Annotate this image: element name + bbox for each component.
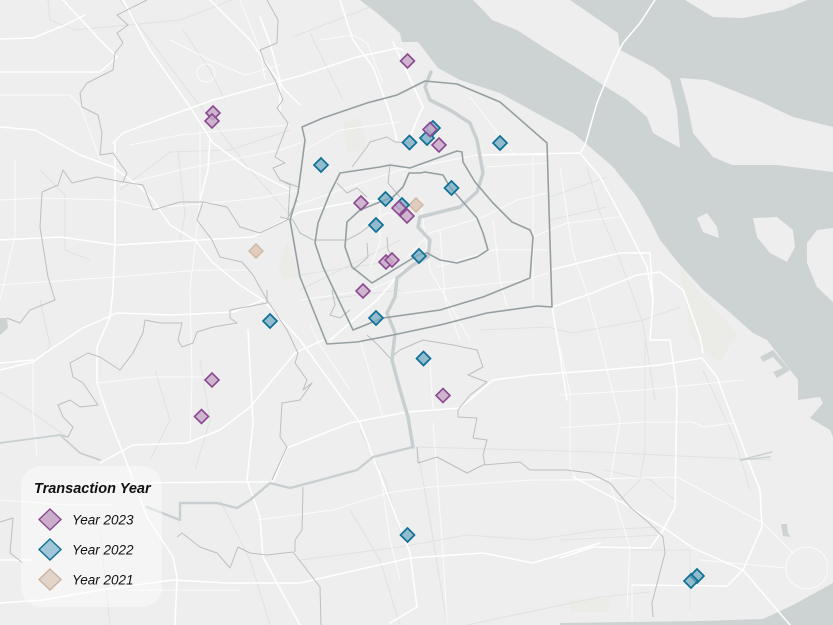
ring roads — [290, 81, 552, 344]
legend item: year 2023 — [39, 509, 134, 530]
airports and green areas — [278, 118, 737, 612]
outer ring — [290, 81, 552, 344]
legend item: year 2021 — [39, 569, 134, 590]
legend item: year 2022 — [39, 539, 134, 560]
middle ring — [315, 151, 533, 330]
legend — [21, 466, 162, 607]
legend item: year 2022: Year 2022 — [72, 542, 134, 558]
port and small lake details — [760, 350, 791, 537]
transaction points: year 2022 — [263, 121, 704, 588]
legend item: year 2021: Year 2021 — [72, 572, 134, 588]
legend title: Transaction Year — [34, 481, 152, 497]
legend item: year 2023: Year 2023 — [72, 512, 134, 528]
islands — [473, 0, 833, 302]
district boundaries — [0, 0, 665, 625]
inner ring — [345, 172, 488, 283]
rivers: Huangpu and branches — [0, 72, 772, 520]
transaction points: year 2021 — [249, 198, 423, 258]
transaction points: year 2023 — [194, 54, 450, 424]
legend panel — [21, 466, 162, 607]
